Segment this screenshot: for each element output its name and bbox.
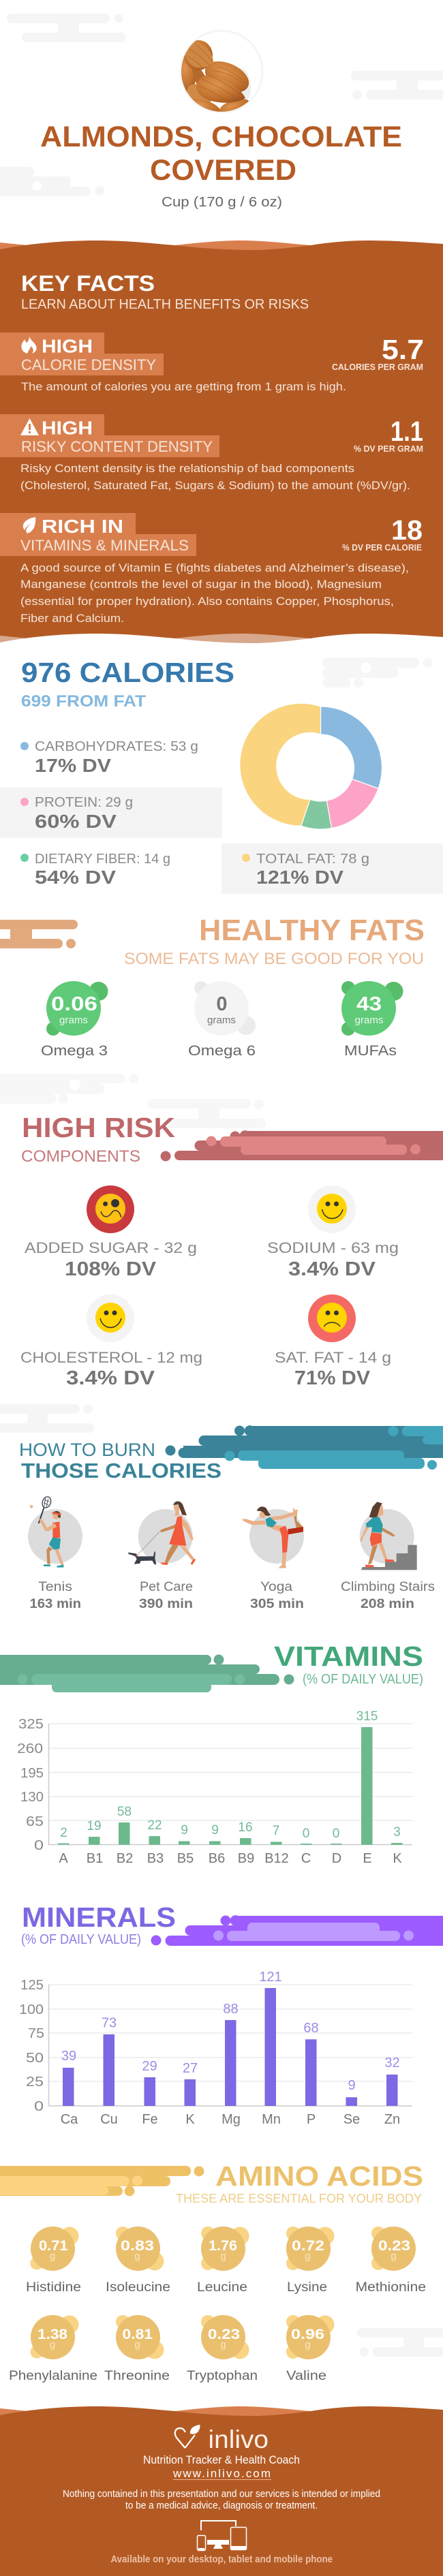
badge: lysine [286, 2226, 334, 2295]
stat: dietary fiber [20, 851, 170, 888]
bar chart: vitamins: B5 [177, 1851, 194, 1866]
badge: phenylalanine [9, 2315, 97, 2383]
bar chart: minerals: 75 [28, 2026, 44, 2041]
fact: rich in vitamins and minerals: A good source of Vitamin E (fights diabetes and Alzheimer’s disease), [20, 562, 409, 574]
bar chart: vitamins [17, 1709, 412, 1866]
badge: omega 3: grams [59, 1014, 88, 1026]
stat: dietary fiber: DIETARY FIBER: 14 g [35, 851, 170, 867]
badge: omega 3: 0.06 [51, 993, 97, 1015]
bar chart: vitamins: E [363, 1851, 372, 1866]
bar chart: minerals: Fe [142, 2112, 158, 2127]
heading: minerals: MINERALS [22, 1902, 176, 1933]
bar chart: minerals: 25 [26, 2075, 44, 2090]
badge: omega 6: Omega 6 [188, 1043, 256, 1059]
bar chart: vitamins: 58 [117, 1805, 132, 1819]
bar chart: vitamins: 16 [238, 1820, 253, 1835]
bar chart: vitamins: 0 [303, 1827, 309, 1841]
badge: isoleucine [106, 2226, 170, 2295]
bar chart: vitamins: K [393, 1851, 402, 1866]
activity: pet care [128, 1502, 196, 1611]
bar chart: vitamins: B1 [87, 1851, 103, 1866]
decoration: yellow stripes [0, 2166, 204, 2197]
bar chart: minerals: K [185, 2112, 195, 2127]
badge: tryptophan: Tryptophan [187, 2369, 258, 2383]
background clouds: header [0, 14, 443, 196]
fact: rich in vitamins and minerals [0, 513, 423, 625]
fact: rich in vitamins and minerals: RICH IN [42, 516, 123, 537]
decoration: red stripes [161, 1130, 443, 1161]
fact: risky content density: RISKY CONTENT DENSITY [21, 438, 213, 455]
badge: isoleucine: 0.83 [121, 2238, 154, 2254]
fact: rich in vitamins and minerals: % DV PER CALORIE [342, 543, 422, 553]
subheading: from fat: 699 FROM FAT [21, 692, 146, 711]
bar chart: vitamins: 315 [356, 1709, 378, 1724]
badge: lysine: g [305, 2250, 311, 2262]
stat: carbohydrates [20, 739, 198, 776]
panel: key facts [0, 240, 443, 647]
activity: climbing stairs [341, 1502, 435, 1611]
bar chart: vitamins: B2 [117, 1851, 133, 1866]
item: saturated fat: SAT. FAT - 14 g [275, 1349, 391, 1366]
heading: those calories: THOSE CALORIES [21, 1459, 222, 1483]
stat: protein: PROTEIN: 29 g [35, 794, 133, 810]
logo wordmark: inlivo [209, 2425, 269, 2453]
bar chart: minerals: 27 [183, 2061, 198, 2076]
bar chart: vitamins: B12 [264, 1851, 289, 1866]
badge: MUFAs [341, 981, 403, 1059]
badge: histidine [26, 2226, 81, 2295]
bar chart: minerals: 88 [223, 2002, 239, 2017]
badge: leucine [197, 2226, 249, 2295]
stat: carbohydrates: CARBOHYDRATES: 53 g [35, 739, 198, 754]
panel: amino acids [0, 2160, 443, 2383]
badge: methionine: g [391, 2250, 397, 2262]
stat: dietary fiber: 54% DV [35, 867, 116, 888]
bar chart: minerals: 73 [102, 2015, 117, 2030]
fact: calorie density: The amount of calories you are getting from 1 gram is high. [21, 381, 346, 393]
badge: isoleucine: g [134, 2250, 140, 2262]
stat: total fat: TOTAL FAT: 78 g [256, 851, 369, 867]
panel: minerals [19, 1902, 443, 2127]
fact: rich in vitamins and minerals: Fiber and Calcium. [20, 612, 124, 625]
fact: rich in vitamins and minerals: VITAMINS & MINERALS [20, 537, 189, 554]
bar chart: minerals: Zn [384, 2112, 400, 2127]
badge: histidine: g [50, 2250, 55, 2262]
badge: tryptophan: 0.23 [208, 2327, 240, 2342]
title: COVERED [150, 154, 296, 187]
tagline: Nutrition Tracker & Health Coach [143, 2453, 300, 2466]
icon: devices [198, 2521, 247, 2551]
activity: yoga [243, 1506, 304, 1611]
badge: leucine: 1.76 [209, 2238, 237, 2254]
decoration: healthy fats stripes [0, 920, 78, 948]
bar chart: vitamins: 65 [26, 1814, 44, 1829]
item: added sugar [25, 1185, 197, 1280]
heading: calories: 976 CALORIES [21, 657, 234, 688]
fact: risky content density [0, 414, 423, 492]
panel: vitamins [0, 1641, 423, 1866]
panel: healthy fats [0, 914, 425, 1059]
bar chart: minerals: Mg [222, 2112, 241, 2127]
availability note: Available on your desktop, tablet and mobile phone [110, 2554, 333, 2565]
badge: valine: 0.96 [291, 2327, 324, 2342]
bar chart: minerals: 50 [26, 2051, 44, 2066]
icon: warning triangle [20, 418, 39, 435]
food photo: almonds [177, 31, 262, 120]
badge: histidine: Histidine [26, 2280, 81, 2295]
subheading: components: COMPONENTS [21, 1147, 140, 1166]
activity: tennis [28, 1495, 82, 1611]
heading: vitamins: VITAMINS [274, 1641, 423, 1672]
item: added sugar: 108% DV [65, 1258, 157, 1280]
donut chart [240, 703, 382, 829]
heading: high risk: HIGH RISK [22, 1112, 175, 1143]
activity: pet care: Pet Care [140, 1580, 193, 1594]
bar chart: minerals: 39 [61, 2049, 76, 2064]
activity: yoga: Yoga [260, 1580, 292, 1594]
badge: leucine: g [220, 2250, 226, 2262]
title [40, 121, 402, 187]
disclaimer [63, 2488, 380, 2511]
bar chart: vitamins: 7 [273, 1824, 279, 1838]
disclaimer: to be a medical advice, diagnosis or treatment. [125, 2500, 318, 2511]
badge: threonine: g [134, 2339, 140, 2350]
item: cholesterol: 3.4% DV [66, 1367, 155, 1389]
item: added sugar: ADDED SUGAR - 32 g [25, 1239, 197, 1256]
badge: methionine: 0.23 [378, 2238, 410, 2254]
bar chart: minerals: 0 [34, 2099, 44, 2114]
fact: calorie density: HIGH [42, 335, 93, 357]
fact: calorie density [0, 332, 424, 393]
activity: pet care: 390 min [139, 1597, 193, 1611]
stat: total fat: 121% DV [256, 867, 343, 888]
fact: risky content density: % DV PER GRAM [354, 444, 423, 454]
activity: yoga: 305 min [250, 1597, 304, 1611]
heading: key facts: KEY FACTS [21, 271, 155, 296]
subheading: LEARN ABOUT HEALTH BENEFITS OR RISKS [21, 297, 309, 312]
badge: omega 6: grams [207, 1014, 236, 1026]
panel: calories [0, 657, 443, 894]
bar chart: minerals: 125 [20, 1978, 44, 1993]
bar chart: vitamins: B6 [209, 1851, 225, 1866]
bar chart: minerals: 29 [142, 2059, 157, 2074]
decoration: teal stripes [165, 1425, 443, 1470]
bar chart: vitamins: 195 [20, 1766, 44, 1781]
stat: carbohydrates: 17% DV [35, 755, 111, 776]
bar chart: vitamins: 9 [211, 1823, 219, 1837]
badge: MUFAs: 43 [356, 993, 382, 1015]
heading: healthy fats: HEALTHY FATS [199, 914, 425, 947]
stat: protein: 60% DV [35, 811, 117, 832]
decoration: green stripes [0, 1654, 294, 1692]
bar chart: vitamins: A [59, 1851, 68, 1866]
bar chart: minerals: 68 [303, 2021, 319, 2036]
subheading: (% OF DAILY VALUE) [21, 1932, 141, 1947]
badge: tryptophan [187, 2315, 258, 2383]
badge: omega 3: Omega 3 [41, 1043, 108, 1059]
fact: rich in vitamins and minerals: (essential for proper hydration). Also contains Copper, Phosphorus, [20, 595, 394, 608]
fact: rich in vitamins and minerals: 18 [391, 514, 423, 546]
fact: risky content density: (Cholesterol, Saturated Fat, Sugars & Sodium) to the amount (%DV/gr). [20, 480, 410, 492]
item: saturated fat [275, 1294, 391, 1389]
subheading: THESE ARE ESSENTIAL FOR YOUR BODY [176, 2192, 422, 2205]
badge: isoleucine: Isoleucine [106, 2280, 170, 2295]
title: ALMONDS, CHOCOLATE [40, 121, 402, 153]
bar chart: minerals: Mn [262, 2112, 281, 2127]
item: cholesterol: CHOLESTEROL - 12 mg [20, 1349, 202, 1366]
activity: tennis: Tenis [38, 1580, 72, 1594]
heading: amino acids: AMINO ACIDS [215, 2160, 423, 2192]
bar chart: minerals: 100 [19, 2002, 44, 2017]
item: sodium [267, 1185, 399, 1280]
bar chart: minerals: 32 [384, 2055, 400, 2070]
stat: total fat [222, 843, 443, 894]
badge: valine [286, 2315, 334, 2383]
bar chart: vitamins: 19 [87, 1819, 102, 1833]
item: saturated fat: 71% DV [294, 1367, 371, 1389]
bar chart: vitamins: 260 [17, 1741, 43, 1756]
subheading: (% OF DAILY VALUE) [303, 1672, 423, 1687]
badge: valine: g [305, 2339, 311, 2350]
bar chart: vitamins: 130 [20, 1790, 44, 1805]
badge: methionine [356, 2226, 426, 2295]
bar chart: vitamins: 22 [147, 1818, 162, 1833]
badge: omega 3 [41, 981, 108, 1059]
bar chart: vitamins: B3 [147, 1851, 164, 1866]
fact: rich in vitamins and minerals: Manganese (controls the level of sugar in the blood), Magnesium [20, 578, 382, 591]
bar chart: minerals: 121 [259, 1970, 282, 1985]
heading: how to burn: HOW TO BURN [19, 1440, 155, 1460]
subheading: SOME FATS MAY BE GOOD FOR YOU [124, 950, 424, 968]
fact: calorie density: 5.7 [382, 334, 424, 365]
badge: omega 6 [188, 981, 256, 1059]
bar chart: vitamins: 3 [393, 1825, 401, 1840]
badge: threonine: 0.81 [123, 2327, 153, 2342]
badge: tryptophan: g [220, 2339, 226, 2350]
item: cholesterol [20, 1294, 202, 1389]
bar chart: minerals [19, 1970, 412, 2127]
bar chart: vitamins: D [332, 1851, 341, 1866]
badge: lysine: Lysine [287, 2280, 327, 2295]
fact: calorie density: CALORIES PER GRAM [332, 362, 423, 372]
badge: phenylalanine: g [50, 2339, 55, 2350]
bar chart: vitamins: 2 [60, 1826, 67, 1840]
badge: phenylalanine: 1.38 [37, 2327, 67, 2342]
fact: risky content density: Risky Content density is the relationship of bad components [20, 463, 354, 475]
bar chart: minerals: Ca [61, 2112, 78, 2127]
bar chart: vitamins: 0 [34, 1838, 44, 1853]
serving size: Cup (170 g / 6 oz) [162, 195, 282, 210]
item: sodium: SODIUM - 63 mg [267, 1239, 399, 1256]
badge: threonine: Threonine [104, 2369, 170, 2383]
footer [0, 2406, 443, 2576]
badge: lysine: 0.72 [292, 2238, 324, 2254]
bar chart: vitamins: 0 [333, 1827, 339, 1841]
decoration: purple stripes [151, 1915, 443, 1946]
badge: MUFAs: MUFAs [344, 1043, 397, 1059]
badge: threonine [104, 2315, 170, 2383]
fact: risky content density: HIGH [42, 417, 93, 439]
bar chart: vitamins: 325 [18, 1717, 44, 1732]
bar chart: minerals: 9 [348, 2078, 356, 2093]
disclaimer: Nothing contained in this presentation and our services is intended or implied [63, 2488, 380, 2500]
fact: calorie density: CALORIE DENSITY [21, 356, 156, 373]
panel: how to burn those calories [0, 1404, 443, 1611]
activity: climbing stairs: 208 min [361, 1597, 414, 1611]
badge: phenylalanine: Phenylalanine [9, 2369, 97, 2383]
activity: climbing stairs: Climbing Stairs [341, 1580, 435, 1594]
bar chart: minerals: Se [343, 2112, 360, 2127]
icon: flame [21, 336, 37, 354]
item: sodium: 3.4% DV [288, 1258, 376, 1280]
badge: omega 6: 0 [216, 993, 228, 1015]
stat: protein [0, 788, 222, 838]
badge: valine: Valine [286, 2369, 326, 2383]
panel: high risk components [0, 1074, 443, 1389]
website link: www.inlivo.com [172, 2467, 271, 2480]
bar chart: minerals: Cu [100, 2112, 118, 2127]
badge: methionine: Methionine [356, 2280, 426, 2295]
badge: leucine: Leucine [197, 2280, 247, 2295]
badge: histidine: 0.71 [39, 2238, 68, 2254]
fact: risky content density: 1.1 [391, 416, 423, 447]
bar chart: vitamins: 9 [181, 1823, 188, 1837]
badge: MUFAs: grams [354, 1014, 383, 1026]
icon: leaf [23, 517, 35, 533]
bar chart: vitamins: C [301, 1851, 311, 1866]
activity: tennis: 163 min [30, 1597, 81, 1611]
bar chart: minerals: P [307, 2112, 316, 2127]
logo: inlivo heart [175, 2425, 200, 2448]
bar chart: vitamins: B9 [238, 1851, 254, 1866]
